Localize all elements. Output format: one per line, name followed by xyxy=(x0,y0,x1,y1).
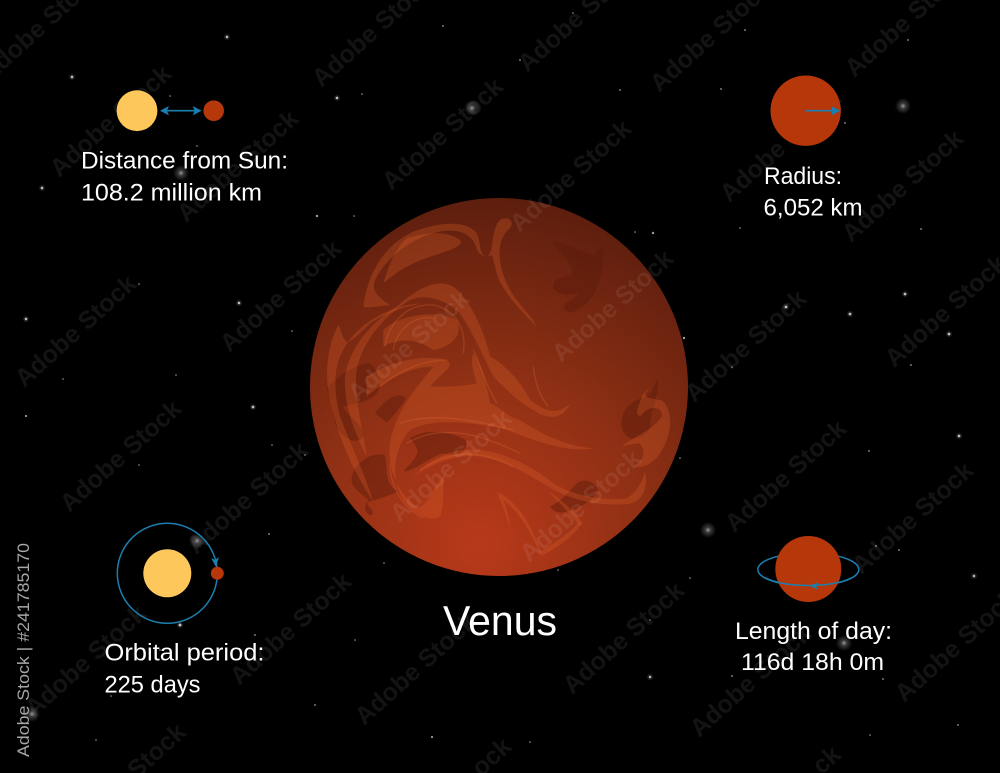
panel: orbital period xyxy=(104,523,264,699)
watermarks: Adobe Stock xyxy=(720,414,852,538)
watermarks: Adobe Stock xyxy=(55,394,187,518)
side credit: Adobe Stock | #241785170 xyxy=(14,543,33,757)
icon: planet with radius arrow xyxy=(770,76,841,146)
watermarks: Adobe Stock xyxy=(680,284,812,408)
orbital period label: 225 days xyxy=(104,672,200,699)
watermarks: Adobe Stock xyxy=(837,124,969,248)
watermarks: Adobe Stock xyxy=(350,607,482,731)
distance label: Distance from Sun: xyxy=(81,148,288,174)
radius label: Radius: xyxy=(764,163,842,190)
watermarks: Adobe Stock xyxy=(385,404,517,528)
watermarks: Adobe Stock xyxy=(343,284,475,408)
watermarks: Adobe Stock xyxy=(45,59,177,183)
watermarks: Adobe Stock xyxy=(847,456,979,580)
radius label: 6,052 km xyxy=(764,194,862,222)
watermarks: Adobe Stock xyxy=(685,619,817,743)
icon: sun and planet with double arrow xyxy=(117,90,224,131)
watermarks: Adobe Stock xyxy=(547,244,679,368)
dark surface patches xyxy=(327,242,658,515)
icon: orbit around sun xyxy=(117,523,224,623)
watermarks: Adobe Stock xyxy=(505,114,637,238)
length of day label: Length of day: xyxy=(735,618,892,645)
orbital period label: Orbital period: xyxy=(104,640,264,667)
watermarks: Adobe Stock xyxy=(172,104,304,228)
panel: distance from sun xyxy=(81,90,288,206)
watermarks: Adobe Stock xyxy=(225,567,357,691)
planet: Venus xyxy=(310,198,688,576)
watermarks: Adobe Stock xyxy=(377,72,509,196)
watermarks: Adobe Stock xyxy=(215,234,347,358)
icon: rotating planet xyxy=(758,536,859,602)
watermarks: Adobe Stock xyxy=(10,269,142,393)
watermarks: Adobe Stock xyxy=(20,599,152,723)
watermarks: Adobe Stock xyxy=(182,436,314,560)
marbled swirls xyxy=(327,218,670,556)
panel: radius xyxy=(764,76,862,222)
length of day label: 116d 18h 0m xyxy=(741,649,884,676)
distance label: 108.2 million km xyxy=(81,180,262,206)
fine marbling lines xyxy=(380,305,548,518)
watermarks: Adobe Stock xyxy=(558,576,690,700)
title: Venus xyxy=(443,597,557,644)
panel: length of day xyxy=(735,536,892,676)
watermarks: Adobe Stock xyxy=(515,444,647,568)
watermarks: Adobe Stock xyxy=(715,84,847,208)
